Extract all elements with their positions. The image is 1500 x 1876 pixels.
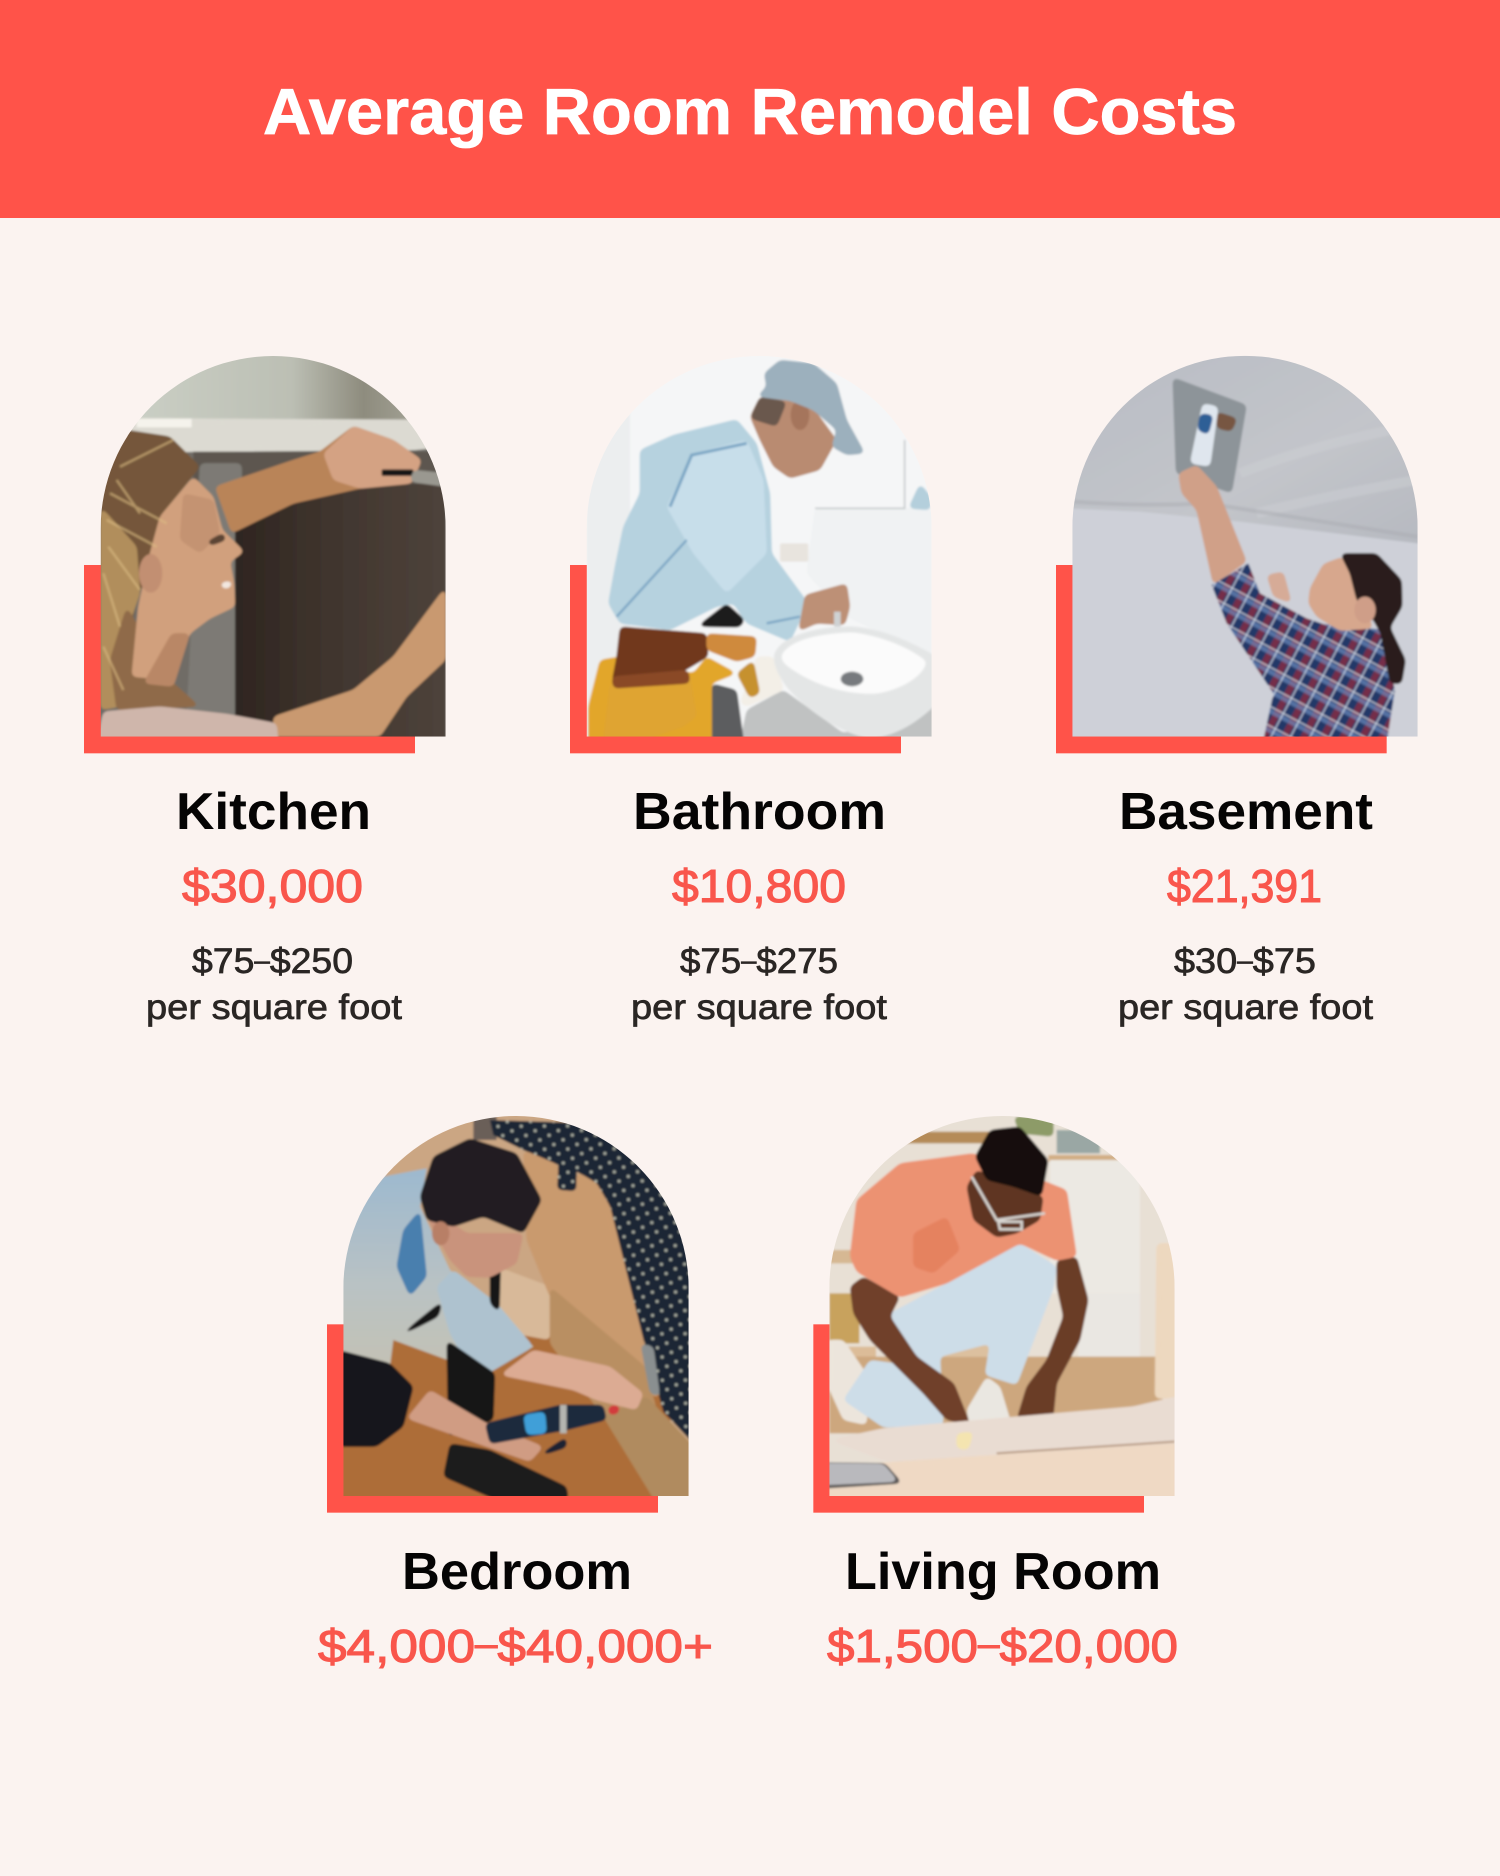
price: kitchen: $30,000 xyxy=(182,860,363,912)
heading: bathroom: Bathroom xyxy=(633,783,886,841)
heading: bedroom: Bedroom xyxy=(402,1543,632,1601)
price: basement: $21,391 xyxy=(1167,860,1322,912)
image frame and living room photo xyxy=(813,1110,1183,1513)
cost per square foot: bathroom: $75 xyxy=(680,942,738,981)
price: bedroom: $4,000 xyxy=(318,1620,459,1672)
image frame and kitchen photo xyxy=(84,350,453,753)
price: living room: – xyxy=(978,1623,1000,1664)
image frame and bedroom photo xyxy=(327,1110,697,1513)
panel: living room xyxy=(813,1110,1183,1672)
header banner xyxy=(0,0,1500,218)
cost per square foot: bathroom: per square foot xyxy=(631,988,887,1027)
cost per square foot: bathroom: $275 xyxy=(756,942,838,981)
price: bedroom: – xyxy=(475,1623,497,1664)
panel: kitchen xyxy=(84,350,453,1027)
price: living room: $1,500 xyxy=(827,1620,968,1672)
cost per square foot: basement: per square foot xyxy=(1118,988,1373,1027)
heading: living room: Living Room xyxy=(845,1543,1161,1601)
price: bedroom: $40,000+ xyxy=(497,1620,713,1672)
image frame and basement photo xyxy=(1056,350,1427,753)
cost per square foot: bathroom xyxy=(631,942,887,1027)
title: Average Room Remodel Costs xyxy=(263,75,1237,148)
cost per square foot: bathroom: – xyxy=(741,945,757,975)
panel: bedroom xyxy=(318,1110,713,1672)
cost per square foot: kitchen: $75 xyxy=(192,942,250,981)
cost per square foot: kitchen: – xyxy=(254,945,270,975)
cost per square foot: kitchen xyxy=(146,942,402,1027)
cost per square foot: basement: $30 xyxy=(1174,942,1232,981)
price: bathroom: $10,800 xyxy=(672,860,846,912)
panel: basement xyxy=(1056,350,1427,1027)
cost per square foot: kitchen: $250 xyxy=(270,942,353,981)
cost per square foot: basement xyxy=(1118,942,1373,1027)
panel: bathroom xyxy=(570,350,940,1027)
price: living room: $20,000 xyxy=(1000,1620,1178,1672)
heading: kitchen: Kitchen xyxy=(176,783,371,841)
heading: basement: Basement xyxy=(1119,783,1373,841)
image frame and bathroom photo xyxy=(570,350,940,753)
cost per square foot: basement: $75 xyxy=(1253,942,1316,981)
cost per square foot: basement: – xyxy=(1237,945,1253,975)
cost per square foot: kitchen: per square foot xyxy=(146,988,402,1027)
